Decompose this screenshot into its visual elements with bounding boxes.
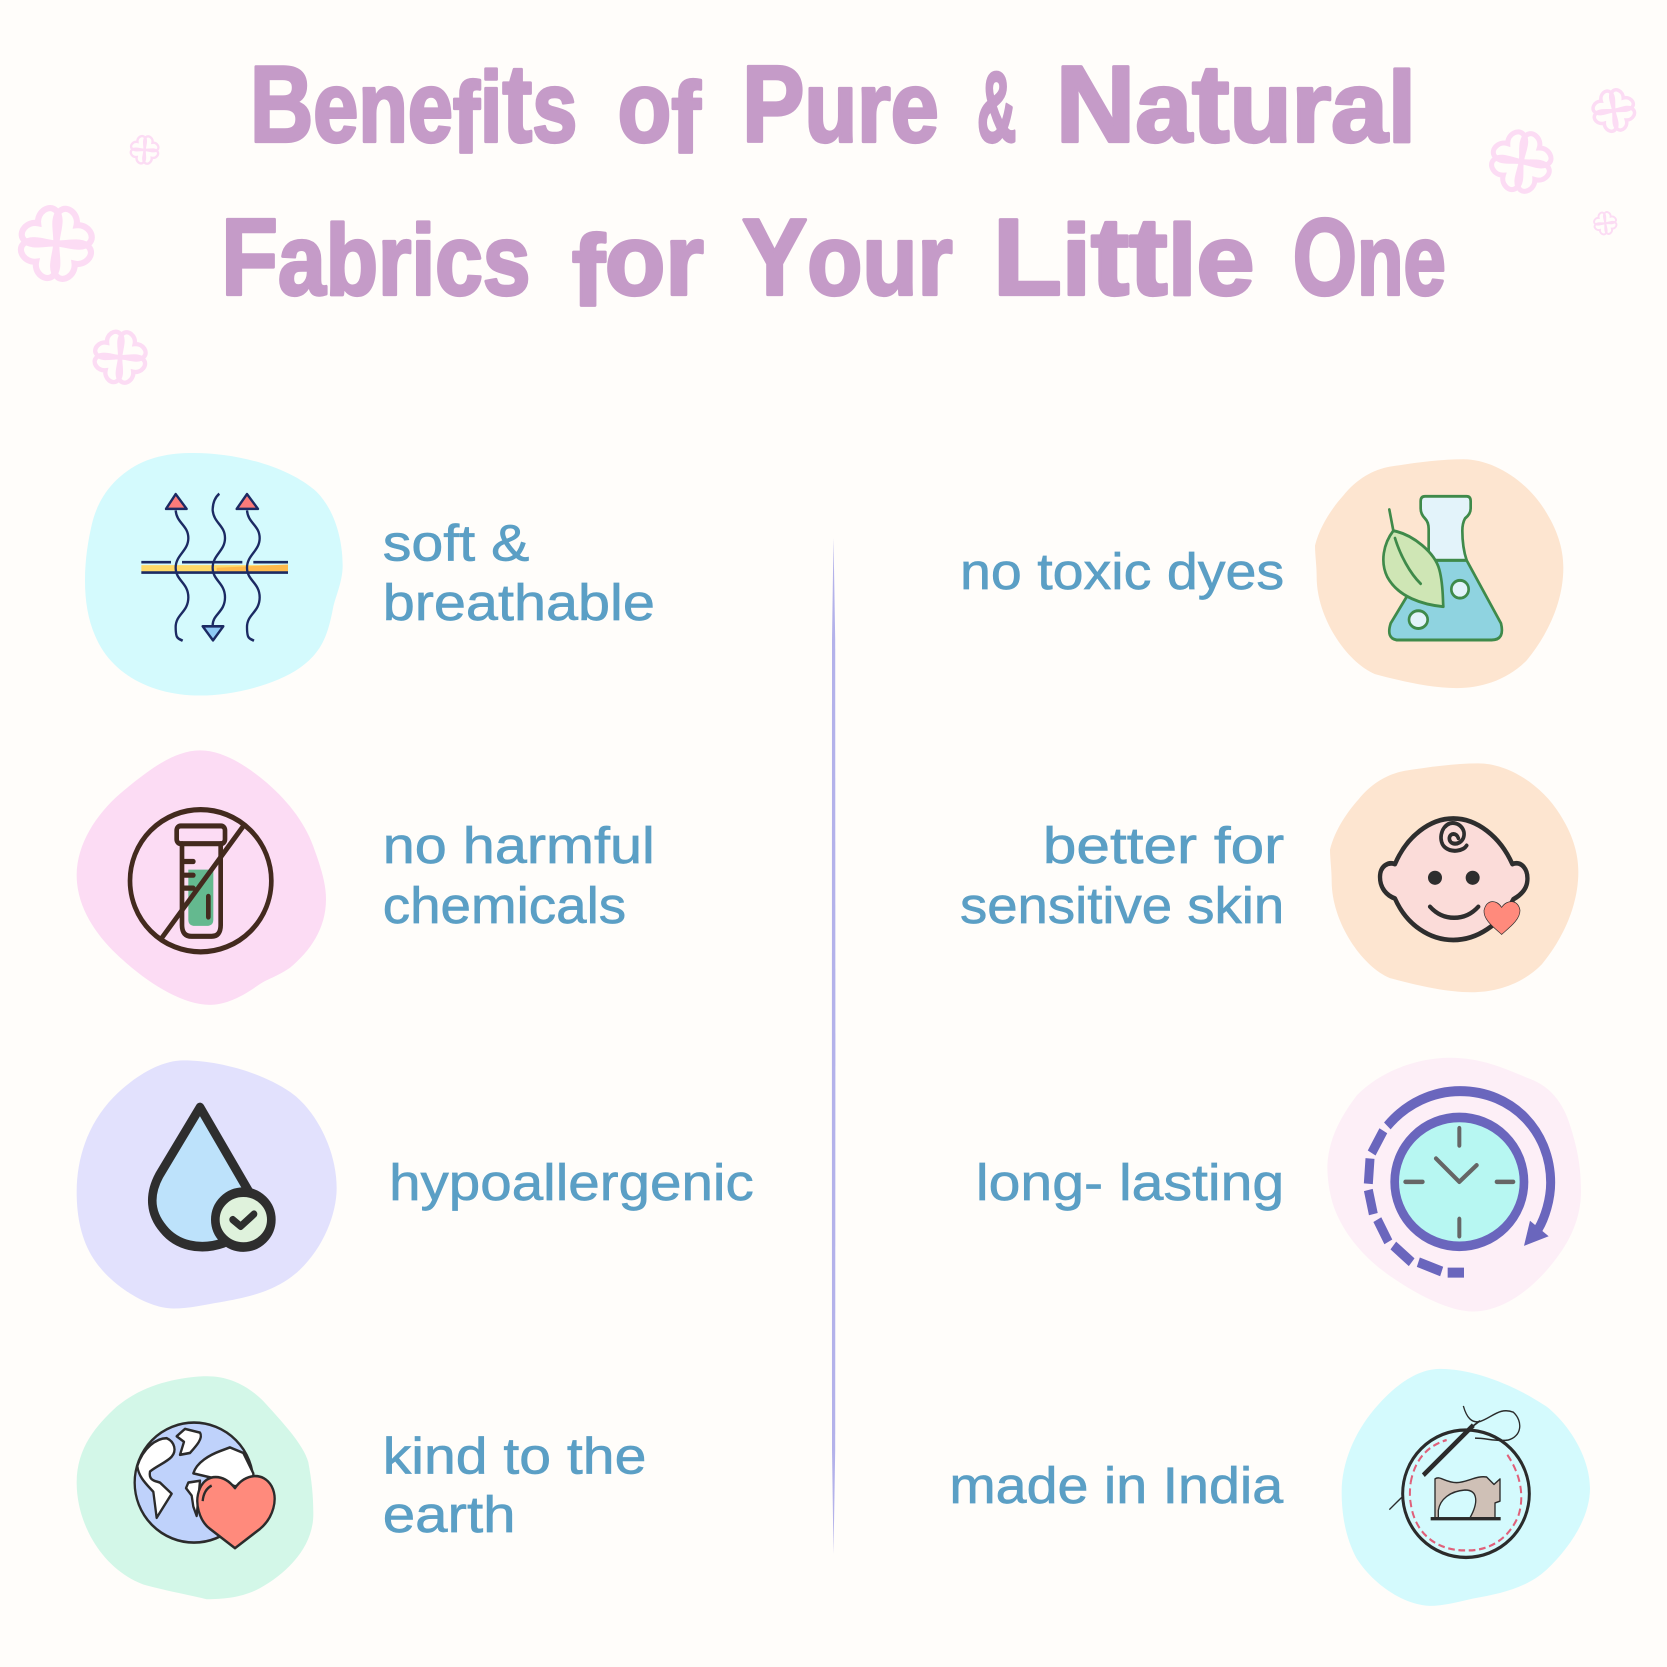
blob: cyan (85, 453, 343, 696)
title: i (480, 52, 502, 163)
title: ts (502, 42, 588, 165)
divider (832, 538, 835, 1554)
label: earth (383, 1486, 516, 1543)
icon: breathable fabric (141, 494, 288, 641)
item: no toxic dyes (960, 459, 1563, 688)
title: Your (742, 196, 953, 317)
label: sensitive skin (960, 877, 1284, 934)
item: made in India (949, 1369, 1590, 1606)
label (960, 817, 1284, 934)
label (383, 1427, 646, 1543)
icon: clock with circular arrow (1368, 1091, 1551, 1273)
label (383, 817, 655, 934)
label: better for (1043, 817, 1284, 874)
title (221, 42, 1446, 327)
icon: earth with heart (135, 1423, 275, 1548)
item: long-lasting (976, 1058, 1581, 1311)
blob: lavender (77, 1060, 337, 1309)
title: f (671, 63, 701, 174)
title: or (605, 205, 704, 316)
title: Little (993, 195, 1254, 318)
title: f (572, 216, 606, 327)
item: soft and breathable (85, 453, 655, 696)
label: chemicals (383, 877, 626, 934)
label: breathable (383, 574, 655, 631)
blob: light pink (1327, 1058, 1581, 1311)
item: no harmful chemicals (77, 750, 655, 1005)
icon: sewing machine in embroidery hoop (1389, 1406, 1529, 1557)
label: hypoallergenic (389, 1154, 754, 1211)
title: Natural (1056, 42, 1416, 165)
blob: cyan (1342, 1369, 1590, 1606)
label (383, 514, 655, 631)
blob: mint (77, 1376, 313, 1599)
icon: flask with leaf (1383, 496, 1502, 640)
label: no toxic dyes (960, 543, 1284, 600)
item: better for sensitive skin (960, 763, 1578, 992)
label: long- lasting (976, 1154, 1284, 1211)
blob: pink (77, 750, 326, 1005)
title: f (453, 63, 480, 174)
label: no harmful (383, 817, 655, 874)
title: Fabrics (221, 196, 530, 317)
label: made in India (949, 1457, 1284, 1514)
title: & (977, 52, 1016, 163)
blob: peach (1315, 459, 1563, 688)
title: Bene (250, 43, 485, 164)
decorative clovers (16, 85, 1639, 387)
label: kind to the (383, 1427, 646, 1484)
title: One (1293, 196, 1446, 317)
title: Pure (742, 43, 939, 164)
icon: baby face with heart (1380, 819, 1527, 940)
blob: peach (1330, 763, 1578, 992)
icon: crossed test tube (130, 810, 271, 952)
item: kind to the earth (77, 1376, 646, 1599)
title: o (618, 52, 679, 163)
icon: water drop with check (152, 1107, 271, 1247)
item: hypoallergenic (77, 1060, 754, 1309)
label: soft & (383, 514, 529, 571)
